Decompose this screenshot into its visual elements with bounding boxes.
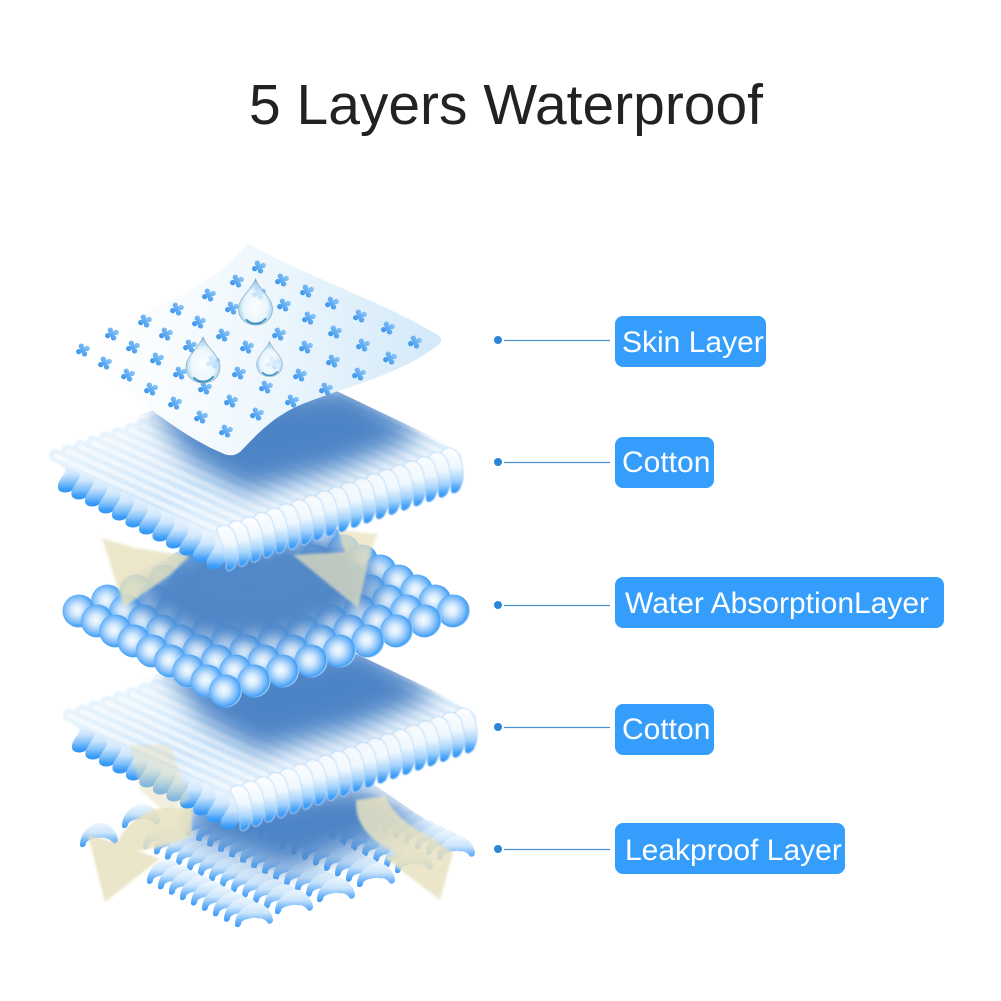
skin layer sheet: [76, 243, 441, 455]
label: Cotton: [494, 437, 714, 488]
arrow: upper left inflow: [102, 538, 190, 607]
arrow: lower right outflow: [356, 796, 453, 900]
leakproof layer strands: [80, 785, 475, 927]
label: Water Absorption Layer: Water AbsorptionLayer: [625, 587, 929, 620]
label: Cotton: Cotton: [622, 446, 710, 479]
perforation crosses: [76, 260, 422, 438]
diagram: five exploded layers: [50, 243, 477, 927]
label: Leakproof Layer: Leakproof Layer: [625, 834, 842, 867]
label: Water Absorption Layer: [494, 577, 944, 628]
label: Leakproof Layer: [494, 823, 845, 874]
label: Skin Layer: Skin Layer: [622, 326, 764, 359]
label: Skin Layer: [494, 316, 766, 367]
label: Cotton (lower): Cotton: [622, 713, 710, 746]
arrow: lower left outflow: [88, 806, 192, 902]
water absorption layer spheres: [62, 514, 470, 708]
cotton layer 2: [64, 632, 477, 831]
label: Cotton (lower): [494, 704, 714, 755]
arrow: upper right inflow: [293, 530, 378, 608]
water drops: [186, 279, 282, 383]
arrow: tint over lower cotton: [130, 745, 190, 812]
title: 5 Layers Waterproof: [249, 73, 763, 137]
cotton layer 1: [50, 372, 463, 571]
